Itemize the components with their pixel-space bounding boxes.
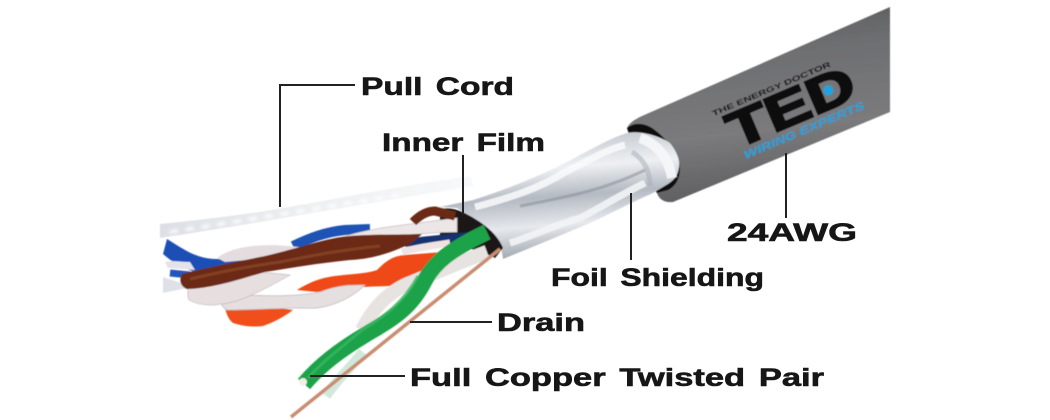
callout: Drain: Drain: [497, 309, 585, 337]
callout: Pull Cord: Pull Cord: [361, 73, 514, 101]
TED logo: WIRING EXPERTS: [742, 100, 867, 162]
callout: Foil Shielding: Foil Shielding: [551, 264, 764, 292]
cable jacket: [627, 7, 890, 202]
callout: 24AWG: [727, 153, 857, 247]
brown pair: [180, 211, 455, 305]
callout: Inner Film: Inner Film: [382, 129, 545, 157]
callout: Full Copper Twisted Pair: Full Copper Twisted Pair: [410, 364, 824, 392]
pull cord: [160, 176, 474, 293]
illustration: stripped cable: [160, 7, 890, 417]
callout: 24AWG: 24AWG: [727, 219, 857, 247]
TED logo: THE ENERGY DOCTOR: [711, 59, 833, 118]
copper drain wire: [291, 249, 500, 417]
blue pair: [163, 229, 470, 275]
callout: Pull Cord: [280, 73, 514, 207]
TED logo: [711, 54, 867, 167]
cut end interior: [440, 208, 503, 258]
white-blue wire: [317, 218, 457, 251]
orange pair: [221, 243, 450, 327]
green pair: [299, 232, 487, 396]
TED logo: TED: [718, 55, 864, 159]
foil shielding: [440, 132, 679, 259]
jacket opening: [627, 124, 680, 193]
